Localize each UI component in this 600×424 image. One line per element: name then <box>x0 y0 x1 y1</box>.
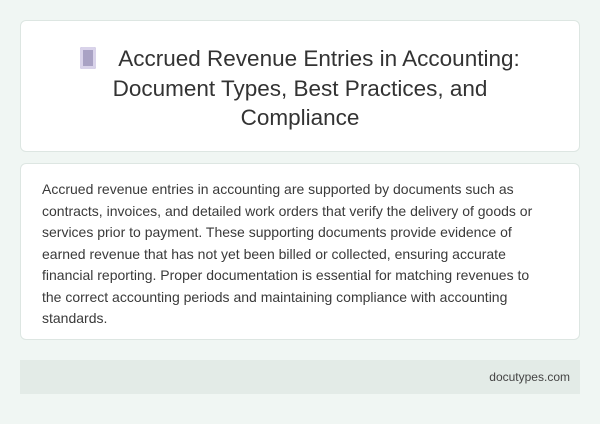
description panel <box>20 163 580 340</box>
title: Accrued Revenue Entries in Accounting: Document Types, Best Practices, and Compliance <box>113 46 520 130</box>
footer text: docutypes.com <box>489 370 570 384</box>
icon: document <box>80 47 96 69</box>
footer <box>20 360 580 394</box>
body text: Accrued revenue entries in accounting are supported by documents such as contracts, invoices, and detailed work orders that verify the delivery of goods or services prior to payment. These supporting documents provide evidence of earned revenue that has not yet been billed or collected, ensuring accurate financial reporting. Proper documentation is essential for matching revenues to the correct accounting periods and maintaining compliance with accounting standards. <box>42 181 532 326</box>
header card <box>20 20 580 152</box>
